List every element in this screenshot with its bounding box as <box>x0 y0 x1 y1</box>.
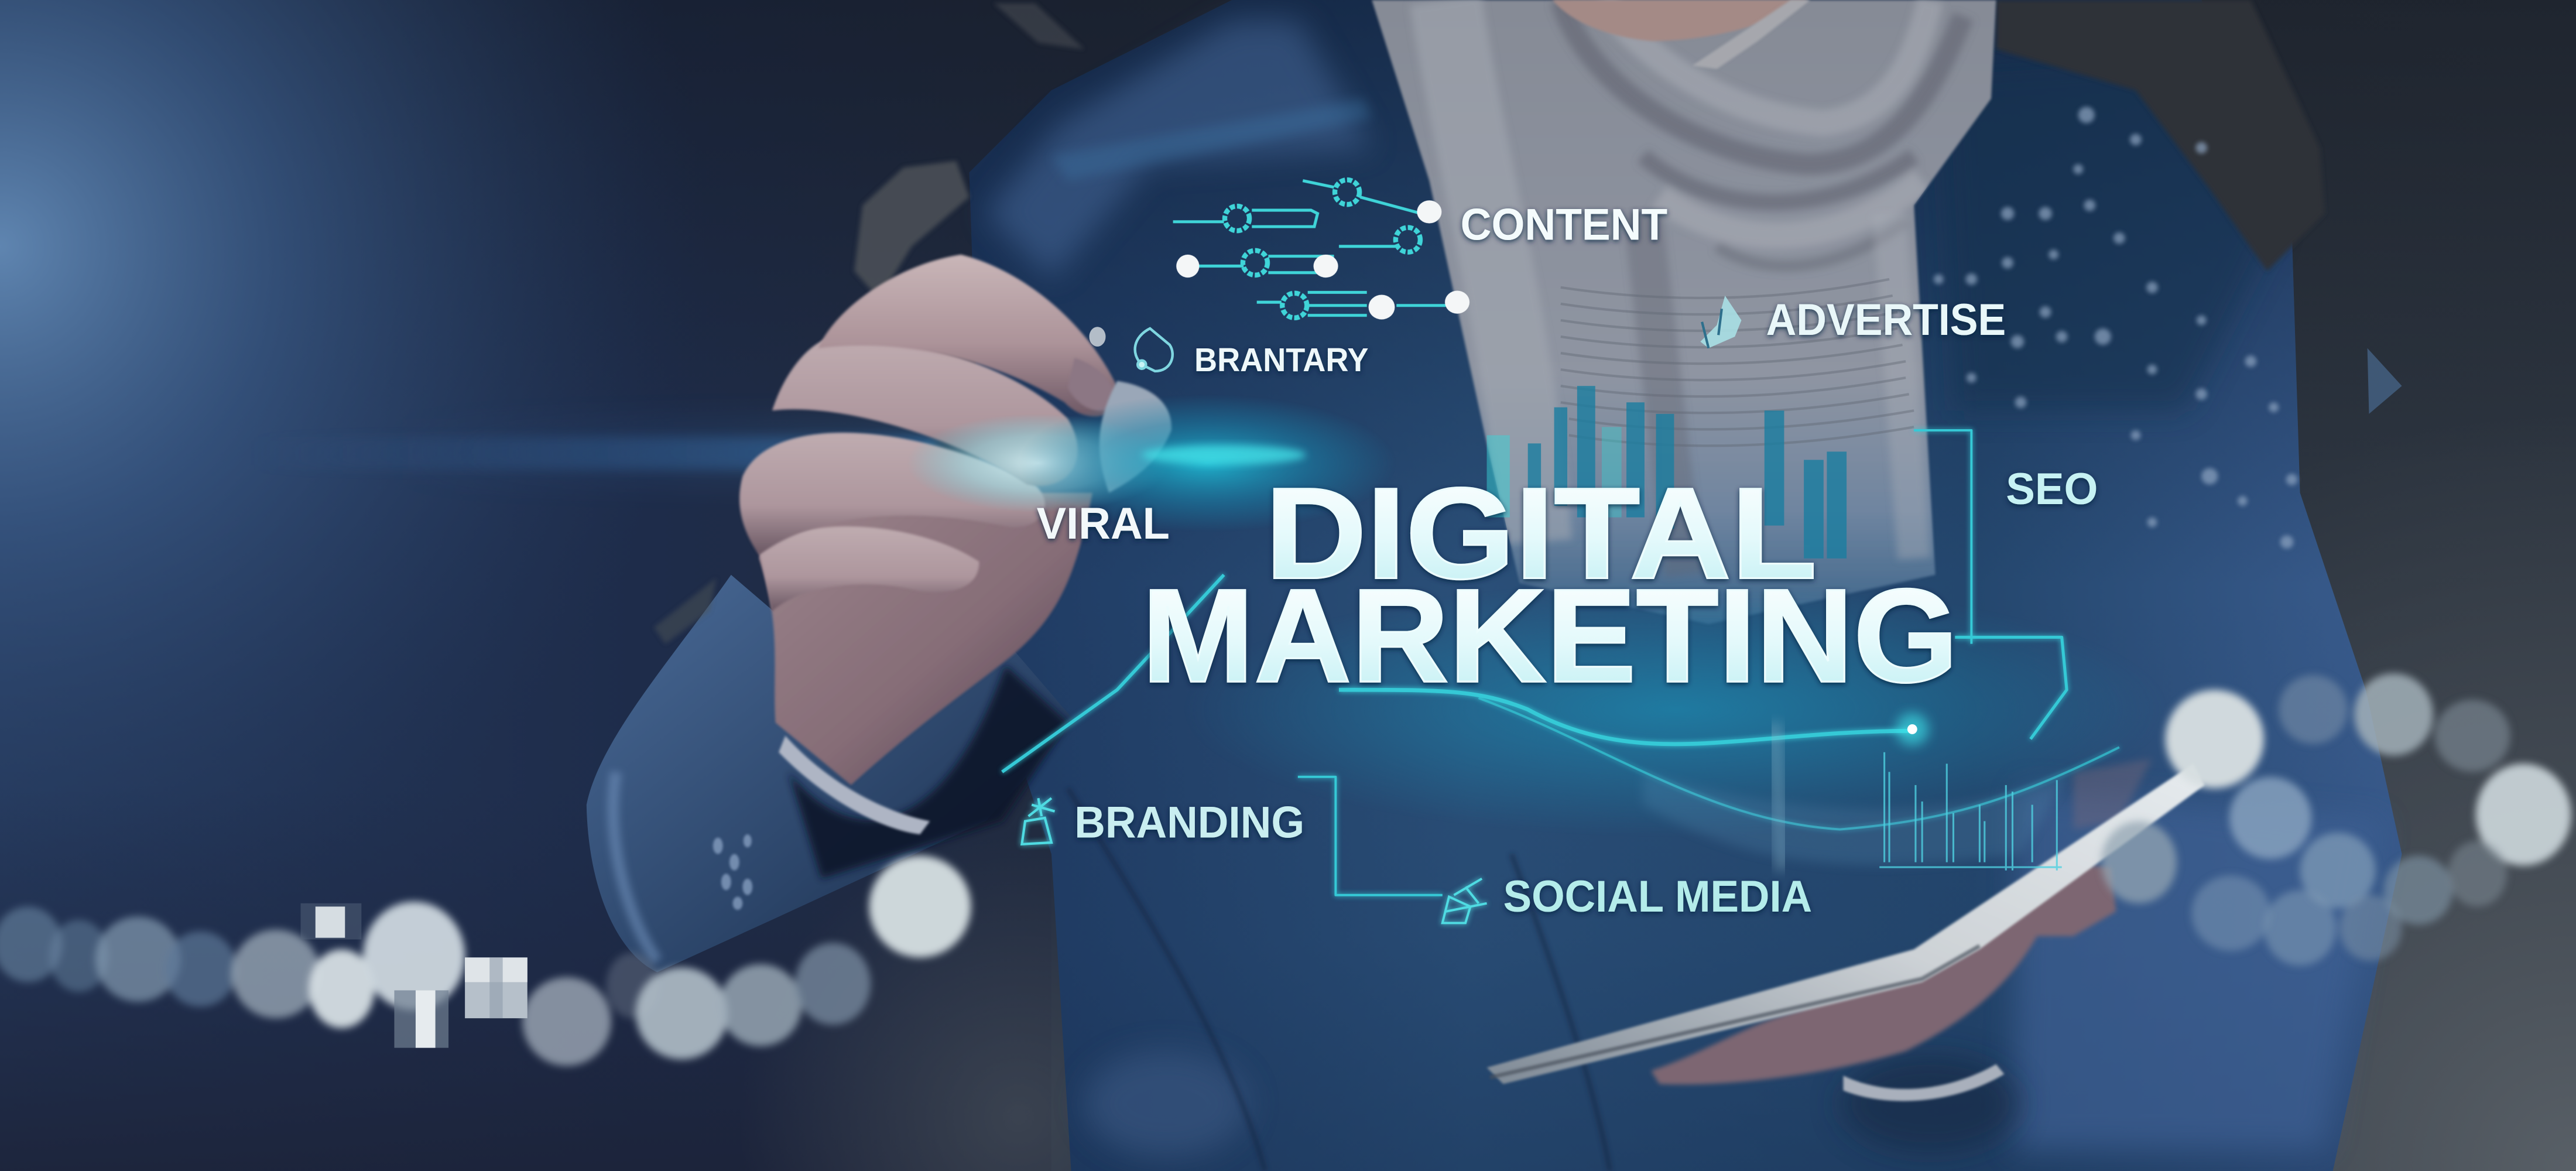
tile: lower <box>394 990 448 1048</box>
textured shards over the jacket <box>654 0 2325 644</box>
little finger <box>759 526 979 611</box>
glass tiles <box>301 903 527 1048</box>
bokeh lights: left trail <box>0 855 971 1066</box>
raised hand <box>739 255 1171 834</box>
fingernail <box>1068 358 1117 411</box>
scattered data dots <box>1934 107 2297 549</box>
content gear icons <box>1089 180 1469 347</box>
headline: digital marketing <box>1142 460 1958 710</box>
label: seo: SEO <box>2006 464 2098 514</box>
label: advertise: ADVERTISE <box>1766 295 2006 345</box>
fingertip glow <box>907 414 1170 512</box>
tablet and lower hand <box>1487 759 2205 1101</box>
thumb <box>1099 381 1171 493</box>
tile: top <box>301 903 361 939</box>
headline word: digital: DIGITAL <box>1265 460 1817 605</box>
shirt collar <box>1692 0 1810 69</box>
branding icon <box>1022 798 1055 844</box>
advertise icon <box>1700 296 1741 348</box>
cuff <box>1843 1064 2004 1101</box>
neck <box>1553 0 1807 41</box>
sleeve buttons <box>713 834 752 910</box>
label: brantary: BRANTARY <box>1194 341 1368 378</box>
small bar chart <box>1879 752 2062 871</box>
tablet body <box>1487 763 2205 1084</box>
holding hand <box>1651 862 2116 1084</box>
social media icon <box>1443 879 1487 923</box>
glass shard: right <box>2368 348 2402 414</box>
jacket torso <box>970 0 2402 1171</box>
label: social media: SOCIAL MEDIA <box>1503 872 1812 922</box>
middle finger <box>772 337 1078 486</box>
bar chart behind headline <box>1487 386 1847 559</box>
circuit lines <box>1002 430 2119 895</box>
glowing light node <box>1643 713 2070 871</box>
brantary icon <box>1135 328 1173 371</box>
bokeh lights: right trail <box>2101 673 2571 965</box>
person: jacket <box>587 0 2402 1171</box>
ring finger <box>739 433 1045 555</box>
scarf knit ribs <box>1561 279 1914 446</box>
headline word: marketing: MARKETING <box>1142 561 1958 710</box>
shirt cuff <box>779 736 930 834</box>
label: content: CONTENT <box>1461 200 1667 250</box>
label: viral: VIRAL <box>1037 499 1170 549</box>
tile: right <box>465 957 527 1018</box>
fingertip cyan flare <box>1019 394 1396 532</box>
scarf <box>1372 0 1996 624</box>
index finger <box>818 255 1121 416</box>
jacket lapel highlights <box>986 20 1372 279</box>
palm <box>759 493 1092 785</box>
left sleeve <box>587 575 1076 973</box>
central holographic glow <box>1183 542 2169 854</box>
scarf folds <box>1445 0 1963 575</box>
label: branding: BRANDING <box>1074 798 1304 848</box>
horizontal light streak <box>246 419 936 484</box>
